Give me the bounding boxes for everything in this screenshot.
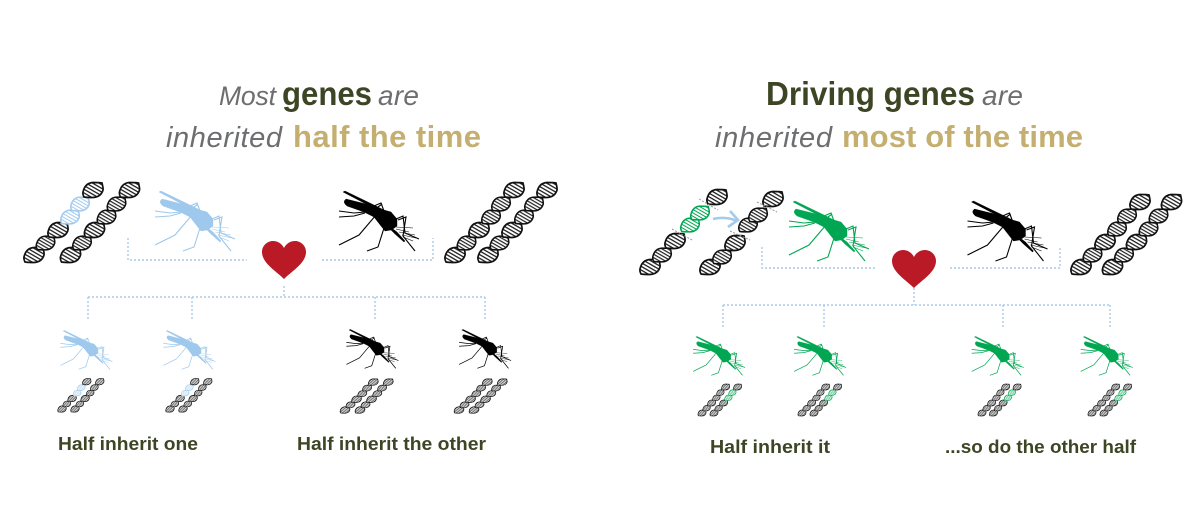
offspring: green mosquito two xyxy=(794,336,846,416)
icon: parent DNA black xyxy=(445,182,557,262)
heading: most genes are inherited half the time: are xyxy=(378,80,419,111)
icon: black parent mosquito xyxy=(339,191,419,251)
offspring: black mosquito two xyxy=(454,329,511,413)
icon: parent DNA with blue gene xyxy=(24,182,140,262)
heading: most genes are inherited half the time xyxy=(166,75,481,154)
icon: parent DNA black xyxy=(1071,194,1182,274)
label: half inherit one: Half inherit one xyxy=(58,434,198,454)
offspring: green mosquito four xyxy=(1081,336,1133,416)
icon: green parent mosquito xyxy=(789,201,869,261)
icon: parent DNA with green driving gene copied across xyxy=(640,190,783,274)
panel: most genes xyxy=(24,75,557,454)
offspring: blue mosquito two xyxy=(163,330,215,412)
icon: heart xyxy=(892,250,936,288)
icon: blue parent mosquito xyxy=(155,191,235,251)
icon: black parent mosquito xyxy=(968,201,1048,261)
offspring: green mosquito three xyxy=(972,336,1024,416)
label: half inherit it: Half inherit it xyxy=(710,437,830,457)
connector lines xyxy=(88,238,485,320)
heading: driving genes are inherited most of the time: inherited xyxy=(715,122,833,154)
heading: driving genes are inherited most of the time: most of the time xyxy=(842,119,1083,154)
icon: heart xyxy=(262,241,306,279)
label: half inherit the other: Half inherit the other xyxy=(297,434,486,454)
panel: driving genes xyxy=(640,75,1182,457)
heading: driving genes are inherited most of the time: Driving genes xyxy=(766,75,975,112)
heading: most genes are inherited half the time: inherited xyxy=(166,122,283,154)
offspring: black mosquito one xyxy=(340,329,398,413)
offspring: blue mosquito one xyxy=(58,330,112,412)
heading: driving genes are inherited most of the time xyxy=(715,75,1083,154)
heading: driving genes are inherited most of the time: are xyxy=(982,80,1023,111)
connector lines xyxy=(723,247,1110,327)
heading: most genes are inherited half the time: Most xyxy=(219,81,278,111)
heading: most genes are inherited half the time: genes xyxy=(282,75,372,112)
heading: most genes are inherited half the time: half the time xyxy=(293,119,481,154)
offspring: green mosquito one xyxy=(693,336,745,416)
label: so do the other half: ...so do the other half xyxy=(945,437,1137,457)
